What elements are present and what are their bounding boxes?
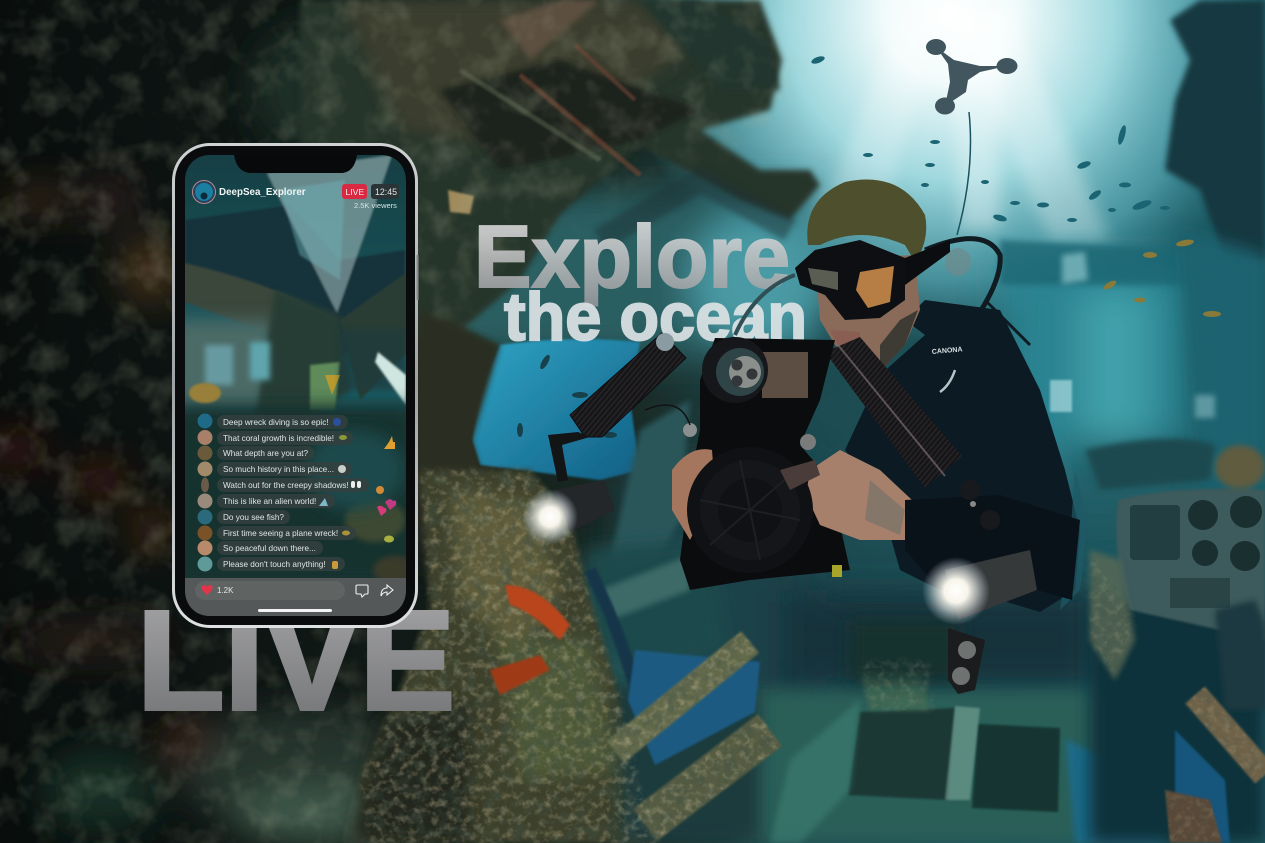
phone screen video: [185, 155, 406, 616]
notch: [234, 155, 357, 173]
sleeve and arm clamp: [905, 480, 1080, 600]
wreck frame below the window: [400, 310, 730, 680]
streamer username: DeepSea_Explorer: [219, 187, 306, 198]
camera housing and lens: [645, 337, 850, 590]
home indicator: [258, 609, 332, 612]
live chat comments: Do you see fish?: [223, 513, 284, 522]
chat avatars: [198, 414, 212, 572]
live chat comments: [217, 415, 369, 571]
left carbon grip: [548, 333, 686, 482]
floating reactions: [376, 436, 396, 542]
floor and front seat: [615, 620, 1165, 843]
live chat comments: So peaceful down there...: [223, 544, 316, 553]
diver body: CANONA: [932, 346, 963, 356]
blue window opening: [472, 339, 640, 480]
tank and hoses: [735, 239, 1030, 345]
live chat comments: That coral growth is incredible!: [223, 434, 334, 443]
diver hands: [672, 449, 912, 540]
comment icon: [356, 585, 368, 597]
viewer count: 2.5K viewers: [354, 201, 397, 210]
heading words: the ocean: the ocean: [504, 279, 807, 355]
heading word: Explore: Explore: [474, 207, 790, 306]
time badge: 12:45: [375, 187, 397, 197]
time badge: [371, 184, 399, 199]
right carbon tube: [825, 337, 962, 488]
live chat comments: Watch out for the creepy shadows!: [223, 481, 349, 490]
live chat comments: What depth are you at?: [223, 449, 309, 458]
share icon: [381, 585, 393, 596]
coral-covered seat column: [350, 470, 660, 843]
drone with tether: [926, 39, 1018, 235]
live chat comments: So much history in this place...: [223, 465, 334, 474]
right video light: [922, 550, 1037, 694]
background: sunlit water and wreck walls on the right: [430, 0, 1265, 710]
scuba diver with camera rig: [522, 179, 1088, 694]
mottled texture on the dark wreck: [0, 0, 778, 843]
diver body: [845, 300, 1088, 612]
head and neck: [807, 179, 926, 372]
LIVE badge: [342, 184, 367, 199]
left video light: [522, 480, 615, 545]
chat inline emoji: [319, 418, 361, 569]
diving mask: [795, 240, 950, 320]
title: Explore the ocean: [474, 207, 807, 355]
streamer avatar: [192, 180, 216, 204]
wreck right wall: [1000, 0, 1265, 490]
like button and count: [195, 581, 345, 600]
smartphone livestream mockup: [172, 143, 418, 628]
fish school: [517, 55, 1221, 438]
LIVE badge: LIVE: [346, 187, 364, 197]
coral speckle and orange growths: [358, 468, 1264, 843]
phone frame: [172, 143, 418, 628]
reel housing: [687, 447, 842, 577]
word LIVE: LIVE: [137, 581, 455, 739]
like button and count: 1.2K: [217, 586, 234, 595]
live chat comments: First time seeing a plane wreck!: [223, 529, 338, 538]
live chat comments: This is like an alien world!: [223, 497, 316, 506]
wreck ceiling and debris above the title: [300, 0, 820, 340]
live chat comments: Deep wreck diving is so epic!: [223, 418, 329, 427]
live chat comments: Please don't touch anything!: [223, 560, 326, 569]
cockpit panel lower right: [1085, 439, 1265, 843]
